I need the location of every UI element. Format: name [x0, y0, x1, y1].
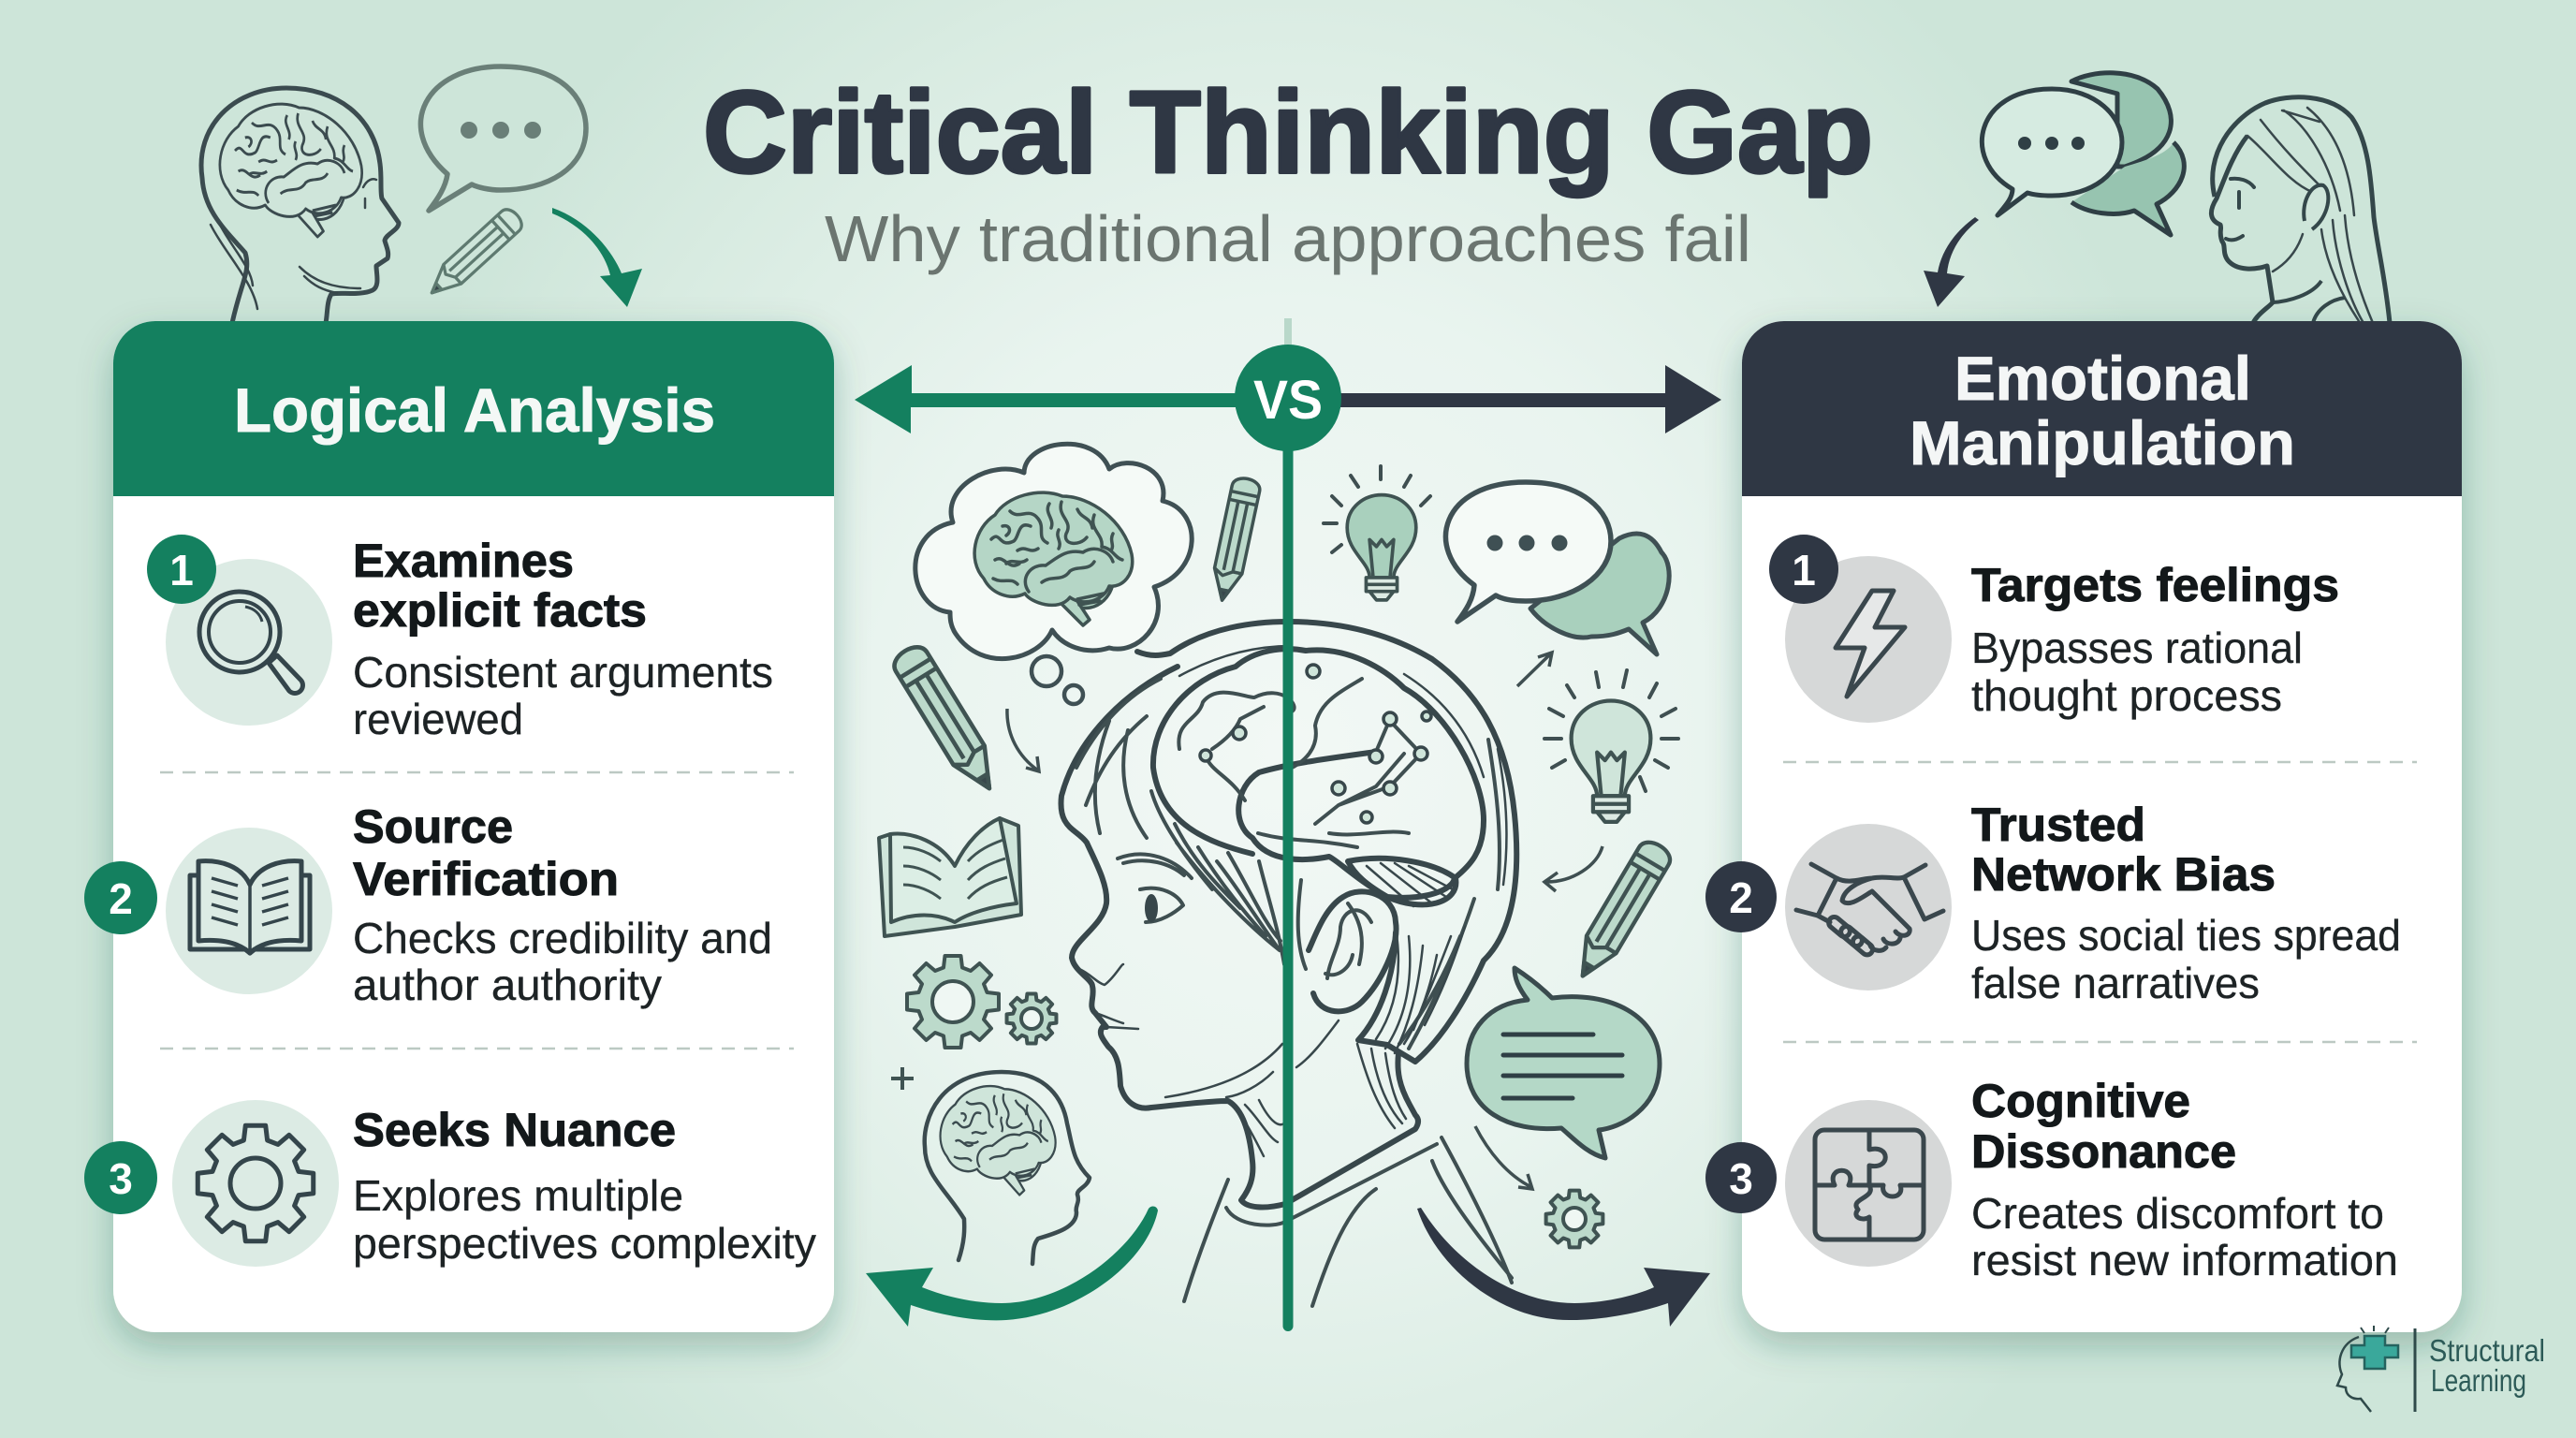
badge 3: 3 — [109, 1154, 133, 1203]
icon: double speech bubbles top right — [1982, 73, 2184, 235]
badge 3 — [1705, 1142, 1777, 1213]
icon: thought cloud with brain — [915, 444, 1192, 704]
text: targets feelings: thought process — [1971, 671, 2282, 720]
divider: central vertical line — [1282, 318, 1294, 1331]
text: trusted network bias: false narratives — [1971, 959, 2260, 1007]
arrow: bottom left green — [866, 1207, 1158, 1327]
text: source verification: Checks credibility and — [353, 914, 772, 962]
logo: structural learning — [2337, 1326, 2545, 1412]
badge 1 — [1769, 535, 1838, 604]
title: Critical Thinking Gap — [703, 68, 1873, 198]
panel header — [113, 321, 834, 496]
text: trusted network bias: Network Bias — [1971, 848, 2276, 901]
text: trusted network bias: Trusted — [1971, 799, 2145, 851]
icon: pencil left — [889, 641, 1005, 798]
text: examines: Examines — [353, 535, 574, 587]
icon: plus mark — [891, 1067, 914, 1090]
badge 2 — [84, 861, 157, 934]
VS badge — [1235, 345, 1341, 451]
icon: handshake — [1785, 824, 1952, 990]
icon: speech bubbles centre right — [1445, 482, 1669, 654]
hair outline and face — [1137, 622, 1516, 1062]
small arrows between icons — [1007, 653, 1603, 1189]
panel header — [1742, 321, 2462, 496]
badge 1: 1 — [1792, 546, 1816, 594]
text: targets feelings: Targets feelings — [1971, 559, 2339, 611]
icon: gears left — [907, 956, 1056, 1048]
icon: head with brain, top left — [201, 88, 399, 323]
text: cognitive dissonance: Dissonance — [1971, 1125, 2236, 1178]
text: seeks nuance: Explores multiple — [353, 1171, 683, 1220]
item: targets feelings — [1769, 535, 2343, 723]
icon: lightbulb upper — [1324, 466, 1430, 600]
arrow: bottom right dark — [1417, 1208, 1710, 1327]
icon: lightbulb lower — [1544, 670, 1678, 822]
item: examines explicit facts — [147, 535, 777, 743]
panel header: Logical Analysis — [234, 375, 715, 445]
text: examines: reviewed — [353, 695, 523, 743]
icon: pencil right — [1568, 837, 1675, 985]
ear — [1309, 891, 1397, 1011]
panel card — [113, 321, 834, 1332]
item: source verification — [84, 800, 776, 1009]
text: source verification: Verification — [353, 853, 619, 905]
panel card — [1742, 321, 2462, 1332]
icon: girl in profile, top right — [2211, 97, 2390, 323]
badge 1: 1 — [169, 546, 194, 594]
badge 3: 3 — [1729, 1154, 1753, 1203]
icon: text speech bubble lower right — [1467, 968, 1660, 1158]
text: seeks nuance: perspectives complexity — [353, 1219, 816, 1268]
cerebellum — [1348, 858, 1456, 904]
icon: puzzle — [1785, 1100, 1952, 1267]
icon: gear — [172, 1100, 339, 1267]
text: examines: explicit facts — [353, 584, 647, 637]
item: cognitive dissonance — [1705, 1075, 2398, 1284]
badge 2 — [1705, 861, 1777, 932]
icon: open book — [879, 818, 1021, 936]
icon: lightning bolt — [1785, 556, 1952, 723]
collar and shoulders — [1184, 1137, 1512, 1306]
hair strokes — [1076, 679, 1500, 1049]
arrow: dark to emotional panel — [1924, 217, 1979, 307]
text: source verification: author authority — [353, 961, 662, 1009]
panel: logical analysis — [84, 321, 834, 1332]
text: trusted network bias: Uses social ties spread — [1971, 911, 2401, 960]
text: cognitive dissonance: Creates discomfort to — [1971, 1189, 2384, 1238]
icon: pencil top left — [423, 205, 526, 302]
icon: magnifier — [166, 559, 332, 726]
arrow: green to logical panel — [552, 208, 642, 307]
panel header: Manipulation — [1910, 408, 2295, 477]
icon: small head with brain — [925, 1072, 1090, 1264]
badge 1 — [147, 535, 216, 604]
icon: gear lower right — [1546, 1191, 1603, 1247]
icon: book — [166, 828, 332, 994]
subtitle: Why traditional approaches fail — [825, 202, 1751, 275]
text: cognitive dissonance: Cognitive — [1971, 1075, 2190, 1127]
arrow: VS right arrow — [1329, 365, 1721, 433]
logo: structural learning: Structural — [2429, 1333, 2545, 1368]
text: examines: Consistent arguments — [353, 648, 773, 697]
panel: emotional manipulation — [1705, 321, 2462, 1332]
item: seeks nuance — [84, 1100, 816, 1268]
text: cognitive dissonance: resist new information — [1971, 1236, 2398, 1284]
text: targets feelings: Bypasses rational — [1971, 624, 2303, 672]
arrow: VS left arrow — [855, 365, 1254, 433]
icon: speech bubble top left — [420, 66, 586, 211]
badge 2: 2 — [1729, 873, 1753, 922]
eye and brow — [1118, 854, 1192, 922]
item: trusted network bias — [1705, 799, 2405, 1007]
brain inside head — [1153, 649, 1484, 898]
panel header: Emotional — [1954, 344, 2251, 413]
VS badge: VS — [1253, 370, 1323, 431]
text: source verification: Source — [353, 800, 513, 853]
badge 2: 2 — [109, 874, 133, 923]
text: seeks nuance: Seeks Nuance — [353, 1104, 676, 1156]
illustration: central child profile — [1061, 622, 1516, 1306]
icon: pencil beside cloud — [1208, 476, 1262, 603]
logo: structural learning: Learning — [2431, 1363, 2526, 1398]
badge 3 — [84, 1141, 157, 1214]
